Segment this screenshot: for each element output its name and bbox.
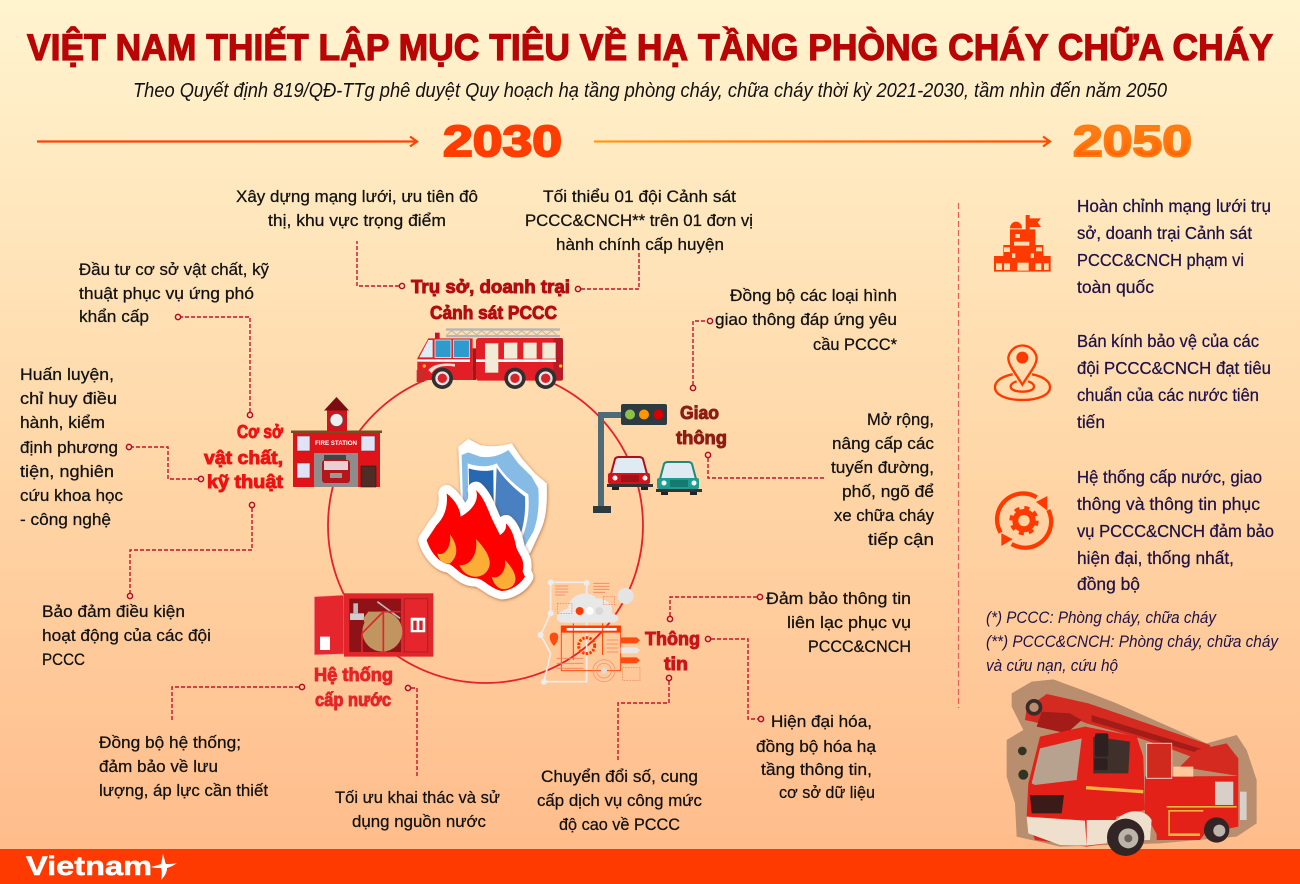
subtitle: Theo Quyết định 819/QĐ-TTg phê duyệt Quy hoạch hạ tầng phòng cháy, chữa cháy thời kỳ 2021-2030, tầm nhìn đến năm 2050 [133, 80, 1167, 102]
text: digital transformation: cấp dịch vụ công mức [537, 791, 702, 810]
icon: fire truck [417, 328, 563, 389]
text: digital transformation: Chuyển đổi số, cung [541, 767, 698, 786]
icon: location pin [995, 345, 1050, 400]
text: training and research: cứu khoa học [20, 486, 123, 505]
text: operating conditions: PCCC [42, 650, 85, 669]
text: operating conditions: Bảo đảm điều kiện [42, 602, 185, 621]
goal text 1: PCCC&CNCH phạm vi [1077, 250, 1244, 270]
goal text 3: vụ PCCC&CNCH đảm bảo [1077, 521, 1274, 541]
panel: 2050 goals [958, 196, 1280, 708]
text: training and research: - công nghệ [20, 510, 111, 529]
text: road expansion [831, 410, 934, 549]
icon: flames [427, 490, 525, 591]
goal text 3 [1077, 467, 1274, 594]
central circle [328, 368, 643, 683]
category label: facilities [204, 422, 283, 492]
goal text 2 [1077, 331, 1271, 432]
icon: headquarters building [994, 215, 1051, 272]
text: water resource use: Tối ưu khai thác và sử [335, 788, 500, 807]
goal text 3: đồng bộ [1077, 574, 1140, 594]
category label: water supply: Hệ thống [314, 665, 393, 685]
year 2050: 2050 [1073, 117, 1192, 166]
icon: traffic light [593, 404, 667, 513]
text: communications [766, 589, 911, 656]
text: digital transformation [537, 767, 702, 834]
text: road expansion: tiếp cận [868, 530, 934, 549]
icon: information network [538, 579, 640, 685]
text: training and research: định phương [20, 438, 118, 457]
text: road expansion: Mở rộng, [867, 410, 934, 429]
icon: fire station: FIRE STATION [315, 440, 357, 447]
text: communications: liên lạc phục vụ [787, 613, 911, 632]
text: operating conditions: hoạt động của các đội [42, 626, 211, 645]
text: operating conditions [42, 602, 211, 669]
category label: information [645, 629, 700, 674]
text: facility investment: thuật phục vụ ứng phó [79, 284, 254, 303]
category label: information: Thông [645, 629, 700, 649]
text: modernisation: Hiện đại hóa, [771, 712, 872, 731]
category label: headquarters: Cảnh sát PCCC [430, 303, 557, 323]
logo: Vietnam [26, 851, 152, 881]
goal text 1: toàn quốc [1077, 277, 1154, 297]
text: water system sync [99, 733, 268, 800]
text: water resource use: dụng nguồn nước [352, 812, 486, 831]
logo [26, 851, 177, 881]
text: facility investment: Đầu tư cơ sở vật chất, kỹ [79, 260, 269, 279]
text: communications: PCCC&CNCH [808, 637, 911, 656]
text: one team per district: hành chính cấp huyện [556, 235, 724, 254]
text: training and research [20, 365, 123, 529]
text: one team per district: Tối thiểu 01 đội Cảnh sát [543, 187, 736, 206]
dashed connectors [126, 241, 826, 777]
category label: transport: thông [676, 428, 727, 448]
text: water system sync: Đồng bộ hệ thống; [99, 733, 241, 752]
category label: facilities: kỹ thuật [207, 472, 283, 492]
goal text 2: chuẩn của các nước tiên [1077, 385, 1259, 405]
year 2030: 2030 [443, 117, 562, 166]
goal text 1: sở, doanh trại Cảnh sát [1077, 223, 1252, 243]
category label: information: tin [664, 654, 688, 674]
text: training and research: Huấn luyện, [20, 365, 114, 384]
text: modernisation: đồng bộ hóa hạ [756, 737, 877, 756]
category label: transport [676, 403, 727, 448]
category label: facilities: vật chất, [204, 448, 283, 468]
footnotes: và cứu nạn, cứu hộ [986, 657, 1118, 675]
goal text 3: thông và thông tin phục [1077, 494, 1260, 514]
footnotes [986, 609, 1280, 675]
text: modernisation: cơ sở dữ liệu [779, 783, 875, 802]
text: training and research: hành, kiểm [20, 413, 105, 432]
text: transport sync [715, 286, 897, 354]
icon: cars [607, 457, 702, 495]
timeline arrow to 2030 [37, 136, 417, 146]
text: road expansion: tuyến đường, [831, 458, 934, 477]
text: modernisation [756, 712, 877, 802]
category label: water supply [314, 665, 393, 710]
icon: shield [458, 439, 547, 556]
text: facility investment [79, 260, 269, 326]
goal text 1: Hoàn chỉnh mạng lưới trụ [1077, 196, 1271, 216]
goal text 3: Hệ thống cấp nước, giao [1077, 467, 1262, 487]
footer bar [0, 849, 1300, 884]
category label: headquarters: Trụ sở, doanh trại [411, 277, 570, 297]
text: network priority: Xây dựng mạng lưới, ưu tiên đô [236, 187, 478, 206]
text: road expansion: phố, ngõ để [842, 482, 934, 501]
text: one team per district [525, 187, 753, 254]
ladder [446, 328, 560, 337]
text: water resource use [335, 788, 500, 831]
goal text 2: Bán kính bảo vệ của các [1077, 331, 1259, 351]
goal text 3: hiện đại, thống nhất, [1077, 548, 1234, 568]
text: training and research: tiện, nghiên [20, 462, 114, 481]
text: network priority: thị, khu vực trọng điểm [268, 211, 446, 230]
category label: headquarters [411, 277, 570, 323]
text: facility investment: khẩn cấp [79, 307, 149, 326]
icon: fire station [291, 397, 382, 487]
footnotes: (**) PCCC&CNCH: Phòng cháy, chữa cháy [986, 633, 1280, 651]
photo illustration: ladder fire truck [1007, 679, 1257, 856]
text: water system sync: lượng, áp lực cần thiết [99, 781, 268, 800]
category label: facilities: Cơ sở [237, 422, 283, 442]
text: communications: Đảm bảo thông tin [766, 589, 911, 608]
category label: transport: Giao [680, 403, 719, 423]
title: VIỆT NAM THIẾT LẬP MỤC TIÊU VỀ HẠ TẦNG PHÒNG CHÁY CHỮA CHÁY [27, 26, 1273, 68]
text: digital transformation: độ cao về PCCC [559, 815, 680, 834]
text: transport sync: cầu PCCC* [813, 335, 897, 354]
text: water system sync: đảm bảo về lưu [99, 757, 218, 776]
icon: gear cycle [997, 493, 1051, 548]
text: training and research: chỉ huy điều [20, 389, 117, 408]
text: network priority [236, 187, 478, 230]
text: transport sync: Đồng bộ các loại hình [730, 286, 897, 305]
icon: hose cabinet [314, 593, 433, 657]
text: transport sync: giao thông đáp ứng yêu [715, 310, 897, 329]
text: modernisation: tầng thông tin, [761, 760, 872, 779]
goal text 1 [1077, 196, 1271, 297]
text: road expansion: xe chữa cháy [834, 506, 934, 525]
category label: water supply: cấp nước [315, 690, 391, 710]
text: road expansion: nâng cấp các [832, 434, 934, 453]
text: one team per district: PCCC&CNCH** trên 01 đơn vị [525, 211, 753, 230]
goal text 2: tiến [1077, 412, 1105, 432]
timeline arrow to 2050 [594, 136, 1050, 146]
footnotes: (*) PCCC: Phòng cháy, chữa cháy [986, 609, 1218, 627]
goal text 2: đội PCCC&CNCH đạt tiêu [1077, 358, 1271, 378]
